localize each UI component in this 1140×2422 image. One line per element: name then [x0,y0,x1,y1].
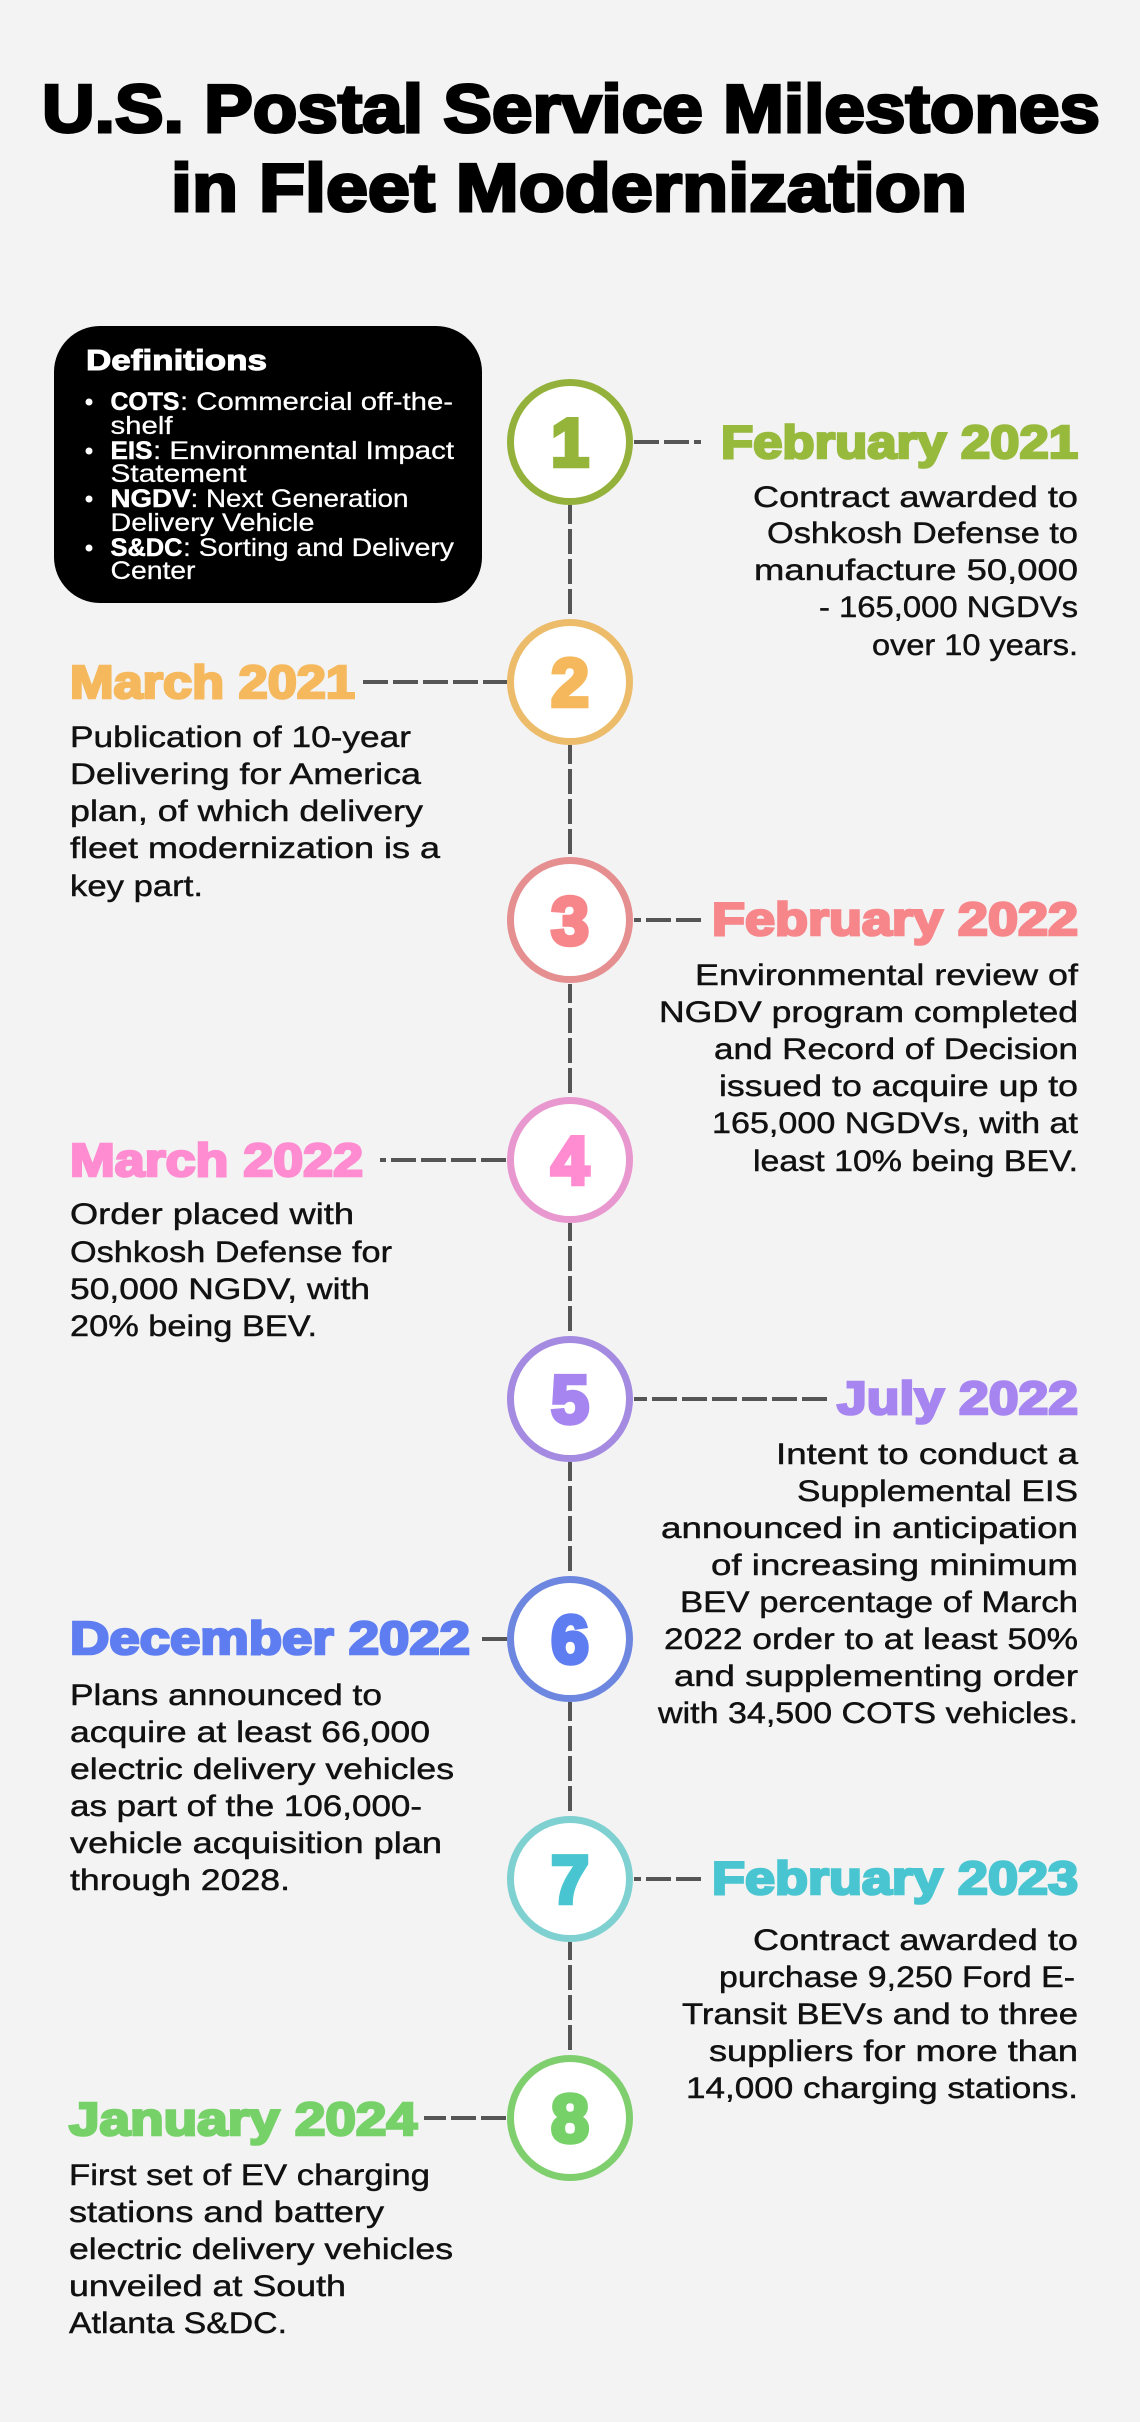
definition: NGDV: : Next Generation [190,485,408,513]
description: Atlanta S&DC. [69,2307,287,2340]
description: First set of EV charging [69,2159,430,2192]
date heading: December 2022 [70,1612,470,1664]
title: U.S. Postal Service Milestones [42,71,1100,147]
number badge 3 [510,860,630,980]
date heading: January 2024 [69,2093,417,2145]
description: Supplemental EIS [797,1475,1078,1508]
definition: COTS: shelf [110,412,173,440]
description: and supplementing order [674,1660,1078,1693]
description: announced in anticipation [661,1512,1078,1545]
description: 14,000 charging stations. [686,2072,1078,2105]
description: with 34,500 COTS vehicles. [657,1697,1078,1730]
description: Publication of 10-year [70,721,411,754]
number badge 4 [510,1100,630,1220]
definition: NGDV [86,485,408,537]
definition: COTS: COTS [110,388,180,416]
definition: EIS: : Environmental Impact [153,437,454,465]
description: suppliers for more than [709,2035,1078,2068]
definition: COTS: : Commercial off-the- [180,388,453,416]
description: Order placed with [70,1198,354,1231]
description: least 10% being BEV. [753,1145,1078,1178]
milestone 7: February 2023 [510,1820,1078,2105]
definition: EIS: Statement [110,460,247,488]
panel: definitions [54,326,482,603]
definition: S&DC: Center [110,557,196,585]
date heading: February 2023 [712,1852,1078,1904]
description: Contract awarded to [753,481,1078,514]
definitions heading: Definitions [86,345,267,377]
number badge 1: 1 [551,405,589,481]
description: 165,000 NGDVs, with at [712,1107,1079,1140]
connector arrow 3 [634,918,701,922]
number badge 6 [510,1580,630,1698]
title: in Fleet Modernization [171,150,967,226]
number badge 4: 4 [551,1123,589,1199]
description: manufacture 50,000 [754,554,1078,587]
definition: EIS: EIS [110,437,152,465]
description [657,1438,1078,1730]
description: of increasing minimum [711,1549,1078,1582]
description: NGDV program completed [659,996,1078,1029]
definition: COTS [86,388,453,440]
description: electric delivery vehicles [70,1753,454,1786]
description: Oshkosh Defense for [70,1236,392,1269]
connector arrow 6 [482,1637,507,1641]
number badge 2: 2 [551,645,589,721]
definition: S&DC [86,534,455,585]
description: BEV percentage of March [680,1586,1078,1619]
description: issued to acquire up to [719,1070,1078,1103]
connector arrow 4 [380,1158,506,1162]
description: Transit BEVs and to three [682,1998,1078,2031]
connector arrow 8 [424,2116,506,2120]
number badge 5 [510,1340,630,1458]
connector arrow 5 [634,1397,827,1401]
number badge 8 [510,2058,630,2178]
description: 2022 order to at least 50% [664,1623,1078,1656]
definition: NGDV: Delivery Vehicle [110,509,314,537]
date heading: March 2021 [70,656,355,708]
date heading: July 2022 [837,1372,1078,1424]
milestone 4: March 2022 [70,1100,630,1343]
milestone 6: December 2022 [70,1580,630,1897]
description [69,2159,453,2340]
description [659,959,1079,1178]
description: Plans announced to [70,1679,382,1712]
milestone 3: February 2022 [510,860,1079,1178]
definition: S&DC: S&DC [110,534,182,562]
description: key part. [70,870,203,903]
description: over 10 years. [872,629,1078,662]
description: - 165,000 NGDVs [819,591,1078,624]
connector arrow 7 [634,1877,701,1881]
number badge 2 [510,622,630,742]
description [753,481,1078,662]
number badge 3: 3 [551,883,589,959]
definition: EIS [86,437,454,488]
connector arrow 1 [634,440,701,444]
description: plan, of which delivery [70,795,423,828]
description: purchase 9,250 Ford E- [719,1961,1075,1994]
definition: NGDV: NGDV [110,485,191,513]
description: Delivering for America [70,758,421,791]
description: through 2028. [70,1864,290,1897]
description: Oshkosh Defense to [767,517,1078,550]
date heading: February 2021 [721,416,1078,468]
description [70,1679,454,1897]
description: as part of the 106,000- [70,1790,422,1823]
number badge 7: 7 [551,1842,589,1918]
description: stations and battery [69,2196,384,2229]
number badge 1 [510,382,630,502]
milestone 1: February 2021 [510,382,1078,662]
milestone 5: July 2022 [510,1340,1078,1730]
number badge 5: 5 [551,1362,589,1438]
number badge 7 [510,1820,630,1938]
number badge 8: 8 [551,2081,589,2157]
description: 50,000 NGDV, with [70,1273,370,1306]
connector arrow 2 [363,680,507,684]
description [70,721,440,903]
description: electric delivery vehicles [69,2233,453,2266]
date heading: February 2022 [712,893,1078,945]
date heading: March 2022 [70,1134,363,1186]
description: Contract awarded to [753,1924,1078,1957]
description: unveiled at South [69,2270,346,2303]
milestone 2: March 2021 [70,622,630,903]
title [42,71,1100,226]
description: fleet modernization is a [70,832,440,865]
description: acquire at least 66,000 [70,1716,430,1749]
description [682,1924,1078,2105]
timeline connector [568,505,572,2050]
description: 20% being BEV. [70,1310,317,1343]
description: Environmental review of [695,959,1079,992]
definition: S&DC: : Sorting and Delivery [183,534,455,562]
description: and Record of Decision [714,1033,1078,1066]
description [70,1198,392,1343]
number badge 6: 6 [551,1602,589,1678]
description: vehicle acquisition plan [70,1827,442,1860]
milestone 8: January 2024 [69,2058,630,2340]
description: Intent to conduct a [776,1438,1078,1471]
